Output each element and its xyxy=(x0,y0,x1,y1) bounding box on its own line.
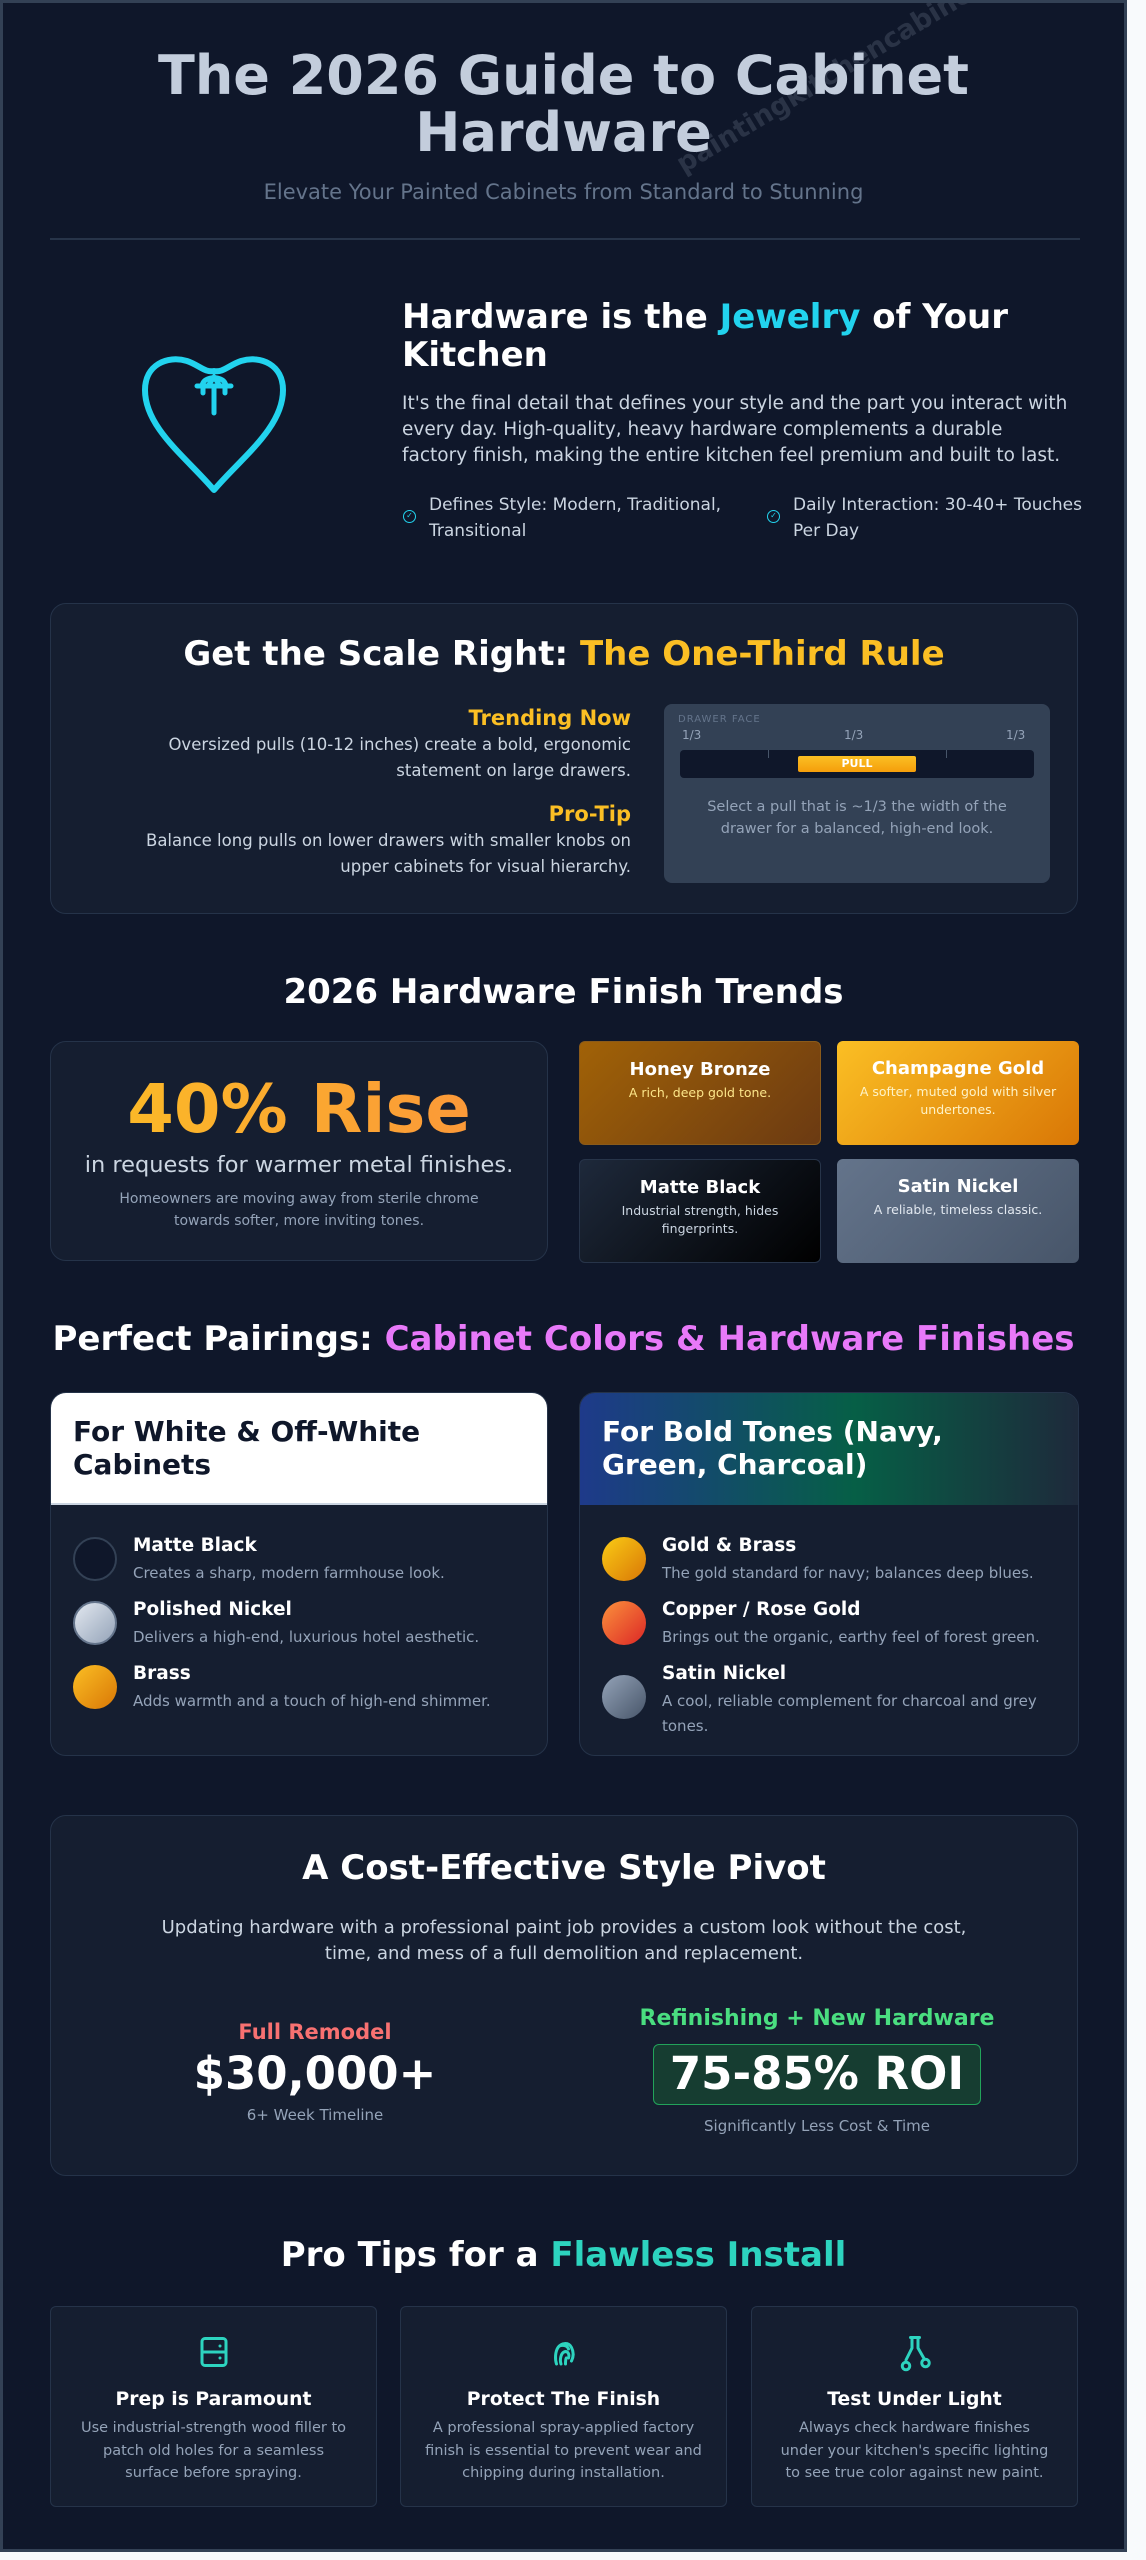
bullet: interaction: Daily Interaction: 30-40+ Touches Per Day xyxy=(793,495,1082,541)
panel: cost pivot: A Cost-Effective Style Pivot xyxy=(302,1848,826,1888)
panel: 40% stat: 40% Rise xyxy=(127,1070,471,1148)
tip: protect: Protect The Finish xyxy=(467,2389,660,2410)
diagram: drawer face xyxy=(664,704,1050,883)
diagram: drawer face: Select a pull that is ~1/3 the width of the drawer for a balanced, high-end look. xyxy=(707,799,1007,837)
text: trending & tip: Pro-Tip xyxy=(549,802,631,826)
panel: white cabinets: Adds warmth and a touch of high-end shimmer. xyxy=(133,1692,491,1710)
tile: champagne gold: Champagne Gold xyxy=(872,1058,1044,1079)
panel: white cabinets: Creates a sharp, modern farmhouse look. xyxy=(133,1564,445,1582)
tip: prep: Prep is Paramount xyxy=(116,2389,311,2410)
tile: matte black: Industrial strength, hides fingerprints. xyxy=(622,1203,778,1236)
text: jewelry paragraph: It's the final detail that defines your style and the part you interact with every day. High-quality, heavy hardware complements a durable factory finish, making the entire kitchen feel premium and built to last. xyxy=(402,393,1067,466)
tile: champagne gold: A softer, muted gold with silver undertones. xyxy=(860,1084,1056,1117)
stat: full remodel: $30,000+ xyxy=(194,2047,436,2100)
heading: jewelry: Hardware is the Jewelry of Your Kitchen xyxy=(402,297,1008,375)
tile: honey bronze: Honey Bronze xyxy=(630,1059,770,1080)
panel: bold tones: The gold standard for navy; balances deep blues. xyxy=(662,1564,1034,1582)
tip: light: Always check hardware finishes under your kitchen's specific lighting to see true color against new paint. xyxy=(781,2420,1048,2481)
panel: bold tones: Brings out the organic, earthy feel of forest green. xyxy=(662,1628,1040,1646)
tip: prep: Use industrial-strength wood filler to patch old holes for a seamless surface before spraying. xyxy=(81,2420,346,2481)
stat: ROI: Refinishing + New Hardware xyxy=(640,2006,994,2031)
stat: ROI: 75-85% ROI xyxy=(670,2047,964,2100)
panel: 40% stat xyxy=(50,1041,548,1261)
diagram: drawer face: 1/3 xyxy=(1006,728,1025,742)
panel: white cabinets: For White & Off-White xyxy=(73,1415,420,1448)
bullet: style: Defines Style: Modern, Traditional, Transitional xyxy=(429,495,721,541)
bullet: style: ✓ xyxy=(406,511,413,520)
panel: bold tones: A cool, reliable complement for charcoal and grey tones. xyxy=(662,1692,1037,1735)
tile: matte black xyxy=(579,1159,821,1263)
tile: honey bronze xyxy=(579,1041,821,1145)
panel: 40% stat: in requests for warmer metal finishes. xyxy=(85,1152,513,1178)
text: trending & tip: Balance long pulls on lower drawers with smaller knobs on upper cabinets for visual hierarchy. xyxy=(146,831,631,876)
panel: cost pivot xyxy=(50,1815,1078,2176)
panel: bold tones xyxy=(579,1392,1079,1756)
diagram: drawer face: 1/3 xyxy=(844,728,863,742)
heading: pro tips: Pro Tips for a Flawless Install xyxy=(281,2235,846,2275)
tip: protect: A professional spray-applied factory finish is essential to prevent wear and chipping during installation. xyxy=(425,2420,702,2481)
stat: ROI: Significantly Less Cost & Time xyxy=(704,2117,930,2135)
tile: satin nickel xyxy=(837,1159,1079,1263)
tile: satin nickel: A reliable, timeless classic. xyxy=(874,1202,1042,1217)
panel: bold tones: Gold & Brass xyxy=(662,1535,796,1556)
panel: bold tones: Copper / Rose Gold xyxy=(662,1599,861,1620)
bullet: interaction: ✓ xyxy=(770,511,777,520)
stat: full remodel: 6+ Week Timeline xyxy=(247,2106,383,2124)
text: trending & tip: Trending Now xyxy=(468,706,631,730)
diagram: drawer face: 1/3 xyxy=(682,728,701,742)
tile: champagne gold xyxy=(837,1041,1079,1145)
tip: prep xyxy=(50,2306,377,2507)
panel: white cabinets: Polished Nickel xyxy=(133,1599,292,1620)
title: Hardware xyxy=(415,101,712,164)
panel: white cabinets: Delivers a high-end, luxurious hotel aesthetic. xyxy=(133,1628,479,1646)
panel: bold tones: Green, Charcoal) xyxy=(602,1448,867,1481)
panel: one-third rule xyxy=(50,603,1078,914)
heading: Get the Scale Right: The One-Third Rule xyxy=(183,634,945,674)
subtitle: Elevate Your Painted Cabinets from Standard to Stunning xyxy=(264,180,863,204)
panel: white cabinets: Cabinets xyxy=(73,1448,211,1481)
panel: bold tones: For Bold Tones (Navy, xyxy=(602,1415,943,1448)
tip: light xyxy=(751,2306,1078,2507)
stat: full remodel xyxy=(194,2020,436,2124)
tip: light: Test Under Light xyxy=(827,2389,1002,2410)
title xyxy=(158,44,969,164)
panel: bold tones: Satin Nickel xyxy=(662,1663,786,1684)
title: The 2026 Guide to Cabinet xyxy=(158,44,969,107)
diagram: drawer face: PULL xyxy=(841,757,872,770)
tip: protect xyxy=(400,2306,727,2507)
tile: satin nickel: Satin Nickel xyxy=(898,1176,1018,1197)
stat: ROI xyxy=(640,2006,994,2135)
text: trending & tip xyxy=(146,706,631,876)
heading: perfect pairings: Perfect Pairings: Cabinet Colors & Hardware Finishes xyxy=(52,1319,1074,1359)
panel: cost pivot: Updating hardware with a professional paint job provides a custom look without the cost, time, and mess of a full demolition and replacement. xyxy=(162,1917,966,1964)
panel: white cabinets xyxy=(50,1392,548,1756)
icon: heart jewelry xyxy=(142,356,286,493)
tile: honey bronze: A rich, deep gold tone. xyxy=(629,1085,771,1100)
text: trending & tip: Oversized pulls (10-12 inches) create a bold, ergonomic statement on large drawers. xyxy=(168,735,631,780)
heading: finish trends: 2026 Hardware Finish Trends xyxy=(283,972,844,1012)
stat: full remodel: Full Remodel xyxy=(238,2020,392,2044)
diagram: drawer face: DRAWER FACE xyxy=(678,714,761,725)
panel: 40% stat: Homeowners are moving away from sterile chrome towards softer, more inviting tones. xyxy=(119,1191,479,1229)
panel: white cabinets: Brass xyxy=(133,1663,191,1684)
tile: matte black: Matte Black xyxy=(640,1177,760,1198)
panel: white cabinets: Matte Black xyxy=(133,1535,257,1556)
